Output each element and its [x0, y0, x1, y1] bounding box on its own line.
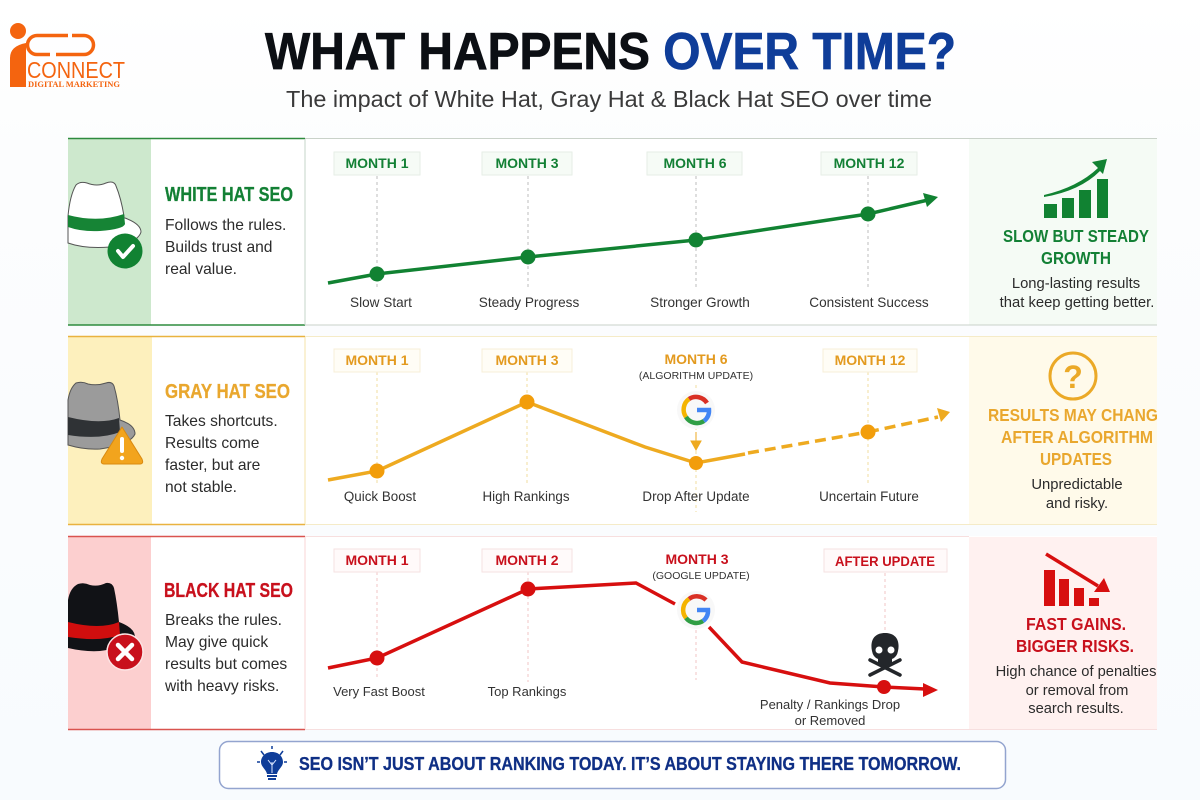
chart: gray hat volatility: MONTH 6	[664, 351, 728, 367]
text block: May give quick	[165, 634, 268, 651]
chart: black hat crash: MONTH 1	[346, 552, 409, 568]
text block: Builds trust and	[165, 239, 272, 256]
takeaway: search results.	[1028, 701, 1124, 717]
icon: skull	[870, 633, 900, 675]
icon: question: ?	[1063, 359, 1083, 395]
text block: Follows the rules.	[165, 217, 286, 234]
takeaway: GROWTH	[1041, 248, 1111, 268]
text block: with heavy risks.	[164, 678, 279, 695]
chart: black hat crash: Top Rankings	[488, 684, 567, 699]
text block: results but comes	[165, 656, 287, 673]
chart: white hat growth: MONTH 6	[664, 155, 727, 171]
title: WHAT HAPPENS OVER TIME?	[265, 23, 956, 81]
callout	[220, 742, 1006, 788]
text block: Takes shortcuts.	[165, 413, 278, 430]
left tint	[68, 139, 151, 325]
takeaway: RESULTS MAY CHANG	[988, 405, 1158, 425]
takeaway	[1000, 226, 1154, 311]
panel: gray hat	[68, 336, 1158, 525]
heading: GRAY HAT SEO	[165, 380, 290, 403]
chart: black hat crash: (GOOGLE UPDATE)	[652, 570, 750, 582]
icon: falling bars	[1044, 554, 1110, 606]
icon: question	[1050, 353, 1096, 399]
logo: DIGITAL MARKETING	[28, 80, 120, 89]
icon: light bulb	[257, 746, 287, 780]
panel: black hat	[68, 536, 1157, 730]
chart: gray hat volatility: Quick Boost	[344, 489, 416, 504]
chart: black hat crash: Very Fast Boost	[333, 684, 425, 699]
text block: Results come	[165, 435, 259, 452]
chart: white hat growth: Steady Progress	[479, 295, 579, 310]
chart: white hat growth: Consistent Success	[809, 295, 929, 310]
takeaway: Unpredictable	[1031, 477, 1123, 493]
logo	[10, 23, 125, 89]
takeaway: High chance of penalties	[996, 664, 1156, 680]
icon: black hat	[68, 583, 143, 670]
chart: white hat growth	[328, 152, 938, 310]
chart: black hat crash: AFTER UPDATE	[835, 553, 935, 569]
text block: real value.	[165, 261, 237, 278]
chart: white hat growth: MONTH 12	[834, 155, 905, 171]
chart: gray hat volatility: (ALGORITHM UPDATE)	[639, 370, 753, 382]
takeaway	[988, 405, 1158, 512]
chart: black hat crash: MONTH 2	[496, 552, 559, 568]
chart: gray hat volatility: MONTH 12	[835, 352, 906, 368]
logo: CONNECT	[27, 57, 125, 83]
chart: black hat crash: MONTH 3	[666, 551, 729, 567]
takeaway: BIGGER RISKS.	[1016, 636, 1134, 656]
chart: white hat growth: Stronger Growth	[650, 295, 750, 310]
subtitle: The impact of White Hat, Gray Hat & Black Hat SEO over time	[286, 86, 932, 112]
takeaway: FAST GAINS.	[1026, 614, 1126, 634]
takeaway: AFTER ALGORITHM	[1001, 427, 1153, 447]
takeaway: that keep getting better.	[1000, 295, 1154, 311]
chart: black hat crash: Penalty / Rankings Drop	[760, 697, 900, 712]
chart: white hat growth: MONTH 3	[496, 155, 559, 171]
icon: white hat	[68, 182, 142, 268]
right tint	[969, 337, 1157, 524]
takeaway: and risky.	[1046, 496, 1108, 512]
chart: gray hat volatility: High Rankings	[482, 489, 570, 504]
text block: faster, but are	[165, 457, 260, 474]
right tint	[969, 537, 1157, 729]
takeaway: SLOW BUT STEADY	[1003, 226, 1149, 246]
text block: not stable.	[165, 479, 237, 496]
icon: growth bars	[1044, 159, 1108, 218]
left tint	[68, 337, 152, 524]
chart: black hat crash	[328, 549, 947, 728]
chart: gray hat volatility: Uncertain Future	[819, 489, 919, 504]
icon: google	[677, 591, 715, 629]
icon: gray hat	[68, 382, 143, 464]
text block	[165, 413, 278, 496]
text block: Breaks the rules.	[165, 612, 282, 629]
text block	[165, 217, 286, 278]
text block	[164, 612, 287, 695]
chart: black hat crash: or Removed	[795, 713, 865, 728]
right tint	[969, 139, 1157, 325]
chart: white hat growth: MONTH 1	[346, 155, 409, 171]
icon: google	[677, 391, 715, 429]
chart: gray hat volatility	[328, 349, 950, 512]
chart: gray hat volatility: MONTH 1	[346, 352, 409, 368]
arrow	[691, 432, 701, 450]
takeaway: UPDATES	[1040, 449, 1112, 469]
heading: BLACK HAT SEO	[164, 579, 293, 602]
callout: SEO ISN’T JUST ABOUT RANKING TODAY. IT’S ABOUT STAYING THERE TOMORROW.	[299, 753, 961, 774]
chart: gray hat volatility: MONTH 3	[496, 352, 559, 368]
chart: gray hat volatility: Drop After Update	[642, 489, 750, 504]
takeaway	[996, 614, 1156, 717]
takeaway: or removal from	[1026, 683, 1128, 699]
heading: WHITE HAT SEO	[165, 183, 293, 206]
takeaway: Long-lasting results	[1012, 276, 1140, 292]
chart: white hat growth: Slow Start	[350, 295, 412, 310]
panel: white hat	[68, 138, 1157, 325]
left tint	[68, 537, 151, 729]
